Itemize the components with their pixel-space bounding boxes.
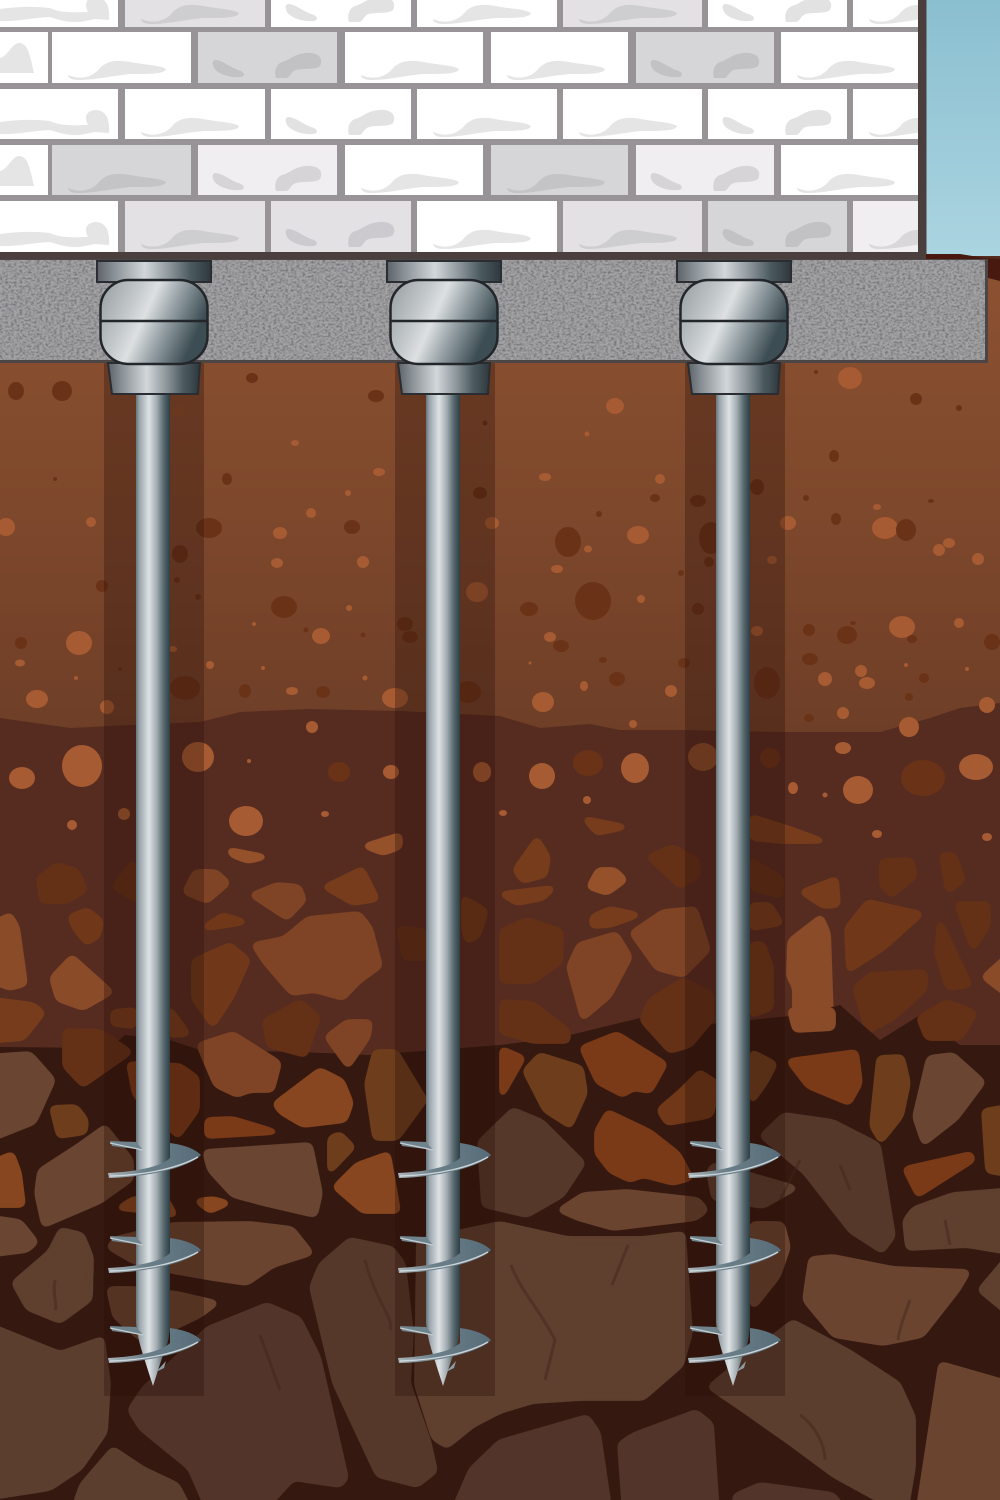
pier 2 bracket	[387, 261, 501, 394]
brick course 3	[0, 89, 967, 139]
soil: bedrock gaps	[0, 1005, 1000, 1500]
soil: middle dark layer	[0, 703, 1000, 1100]
upper layer pebbles	[0, 367, 1000, 722]
wall edge	[918, 0, 926, 258]
rocks straddling the bedrock edge	[65, 980, 975, 1095]
sky behind the wall	[918, 0, 1000, 256]
brick wall	[0, 0, 967, 252]
brick course 5	[0, 201, 967, 252]
rock cracks	[54, 1160, 950, 1460]
middle layer pebbles over layer edge	[9, 697, 995, 841]
helical pier 2	[387, 261, 501, 1386]
helical pier 1	[97, 261, 211, 1386]
soil: upper clay layer	[0, 270, 1000, 740]
bedrock stones	[0, 1034, 1000, 1500]
ground surface mound	[926, 254, 1000, 281]
lower layer rocks	[0, 817, 1000, 1085]
concrete footing slab	[0, 259, 988, 363]
pier 3 shaft	[716, 394, 750, 1386]
pier 3 helix blades	[688, 1141, 781, 1372]
pier 1 helix blades	[108, 1141, 201, 1372]
pier 1 shaft	[136, 394, 170, 1386]
pier 2 helix blades	[398, 1141, 491, 1372]
brick course 4	[0, 145, 918, 195]
helical pier 3	[677, 261, 791, 1386]
pier 1 bracket	[97, 261, 211, 394]
pier 3 bracket	[677, 261, 791, 394]
brick course 1	[0, 0, 967, 27]
brick course 2	[0, 32, 918, 83]
pier 2 shaft	[426, 394, 460, 1386]
foundation footing band	[0, 252, 926, 260]
pier shadow channels	[104, 363, 785, 1396]
